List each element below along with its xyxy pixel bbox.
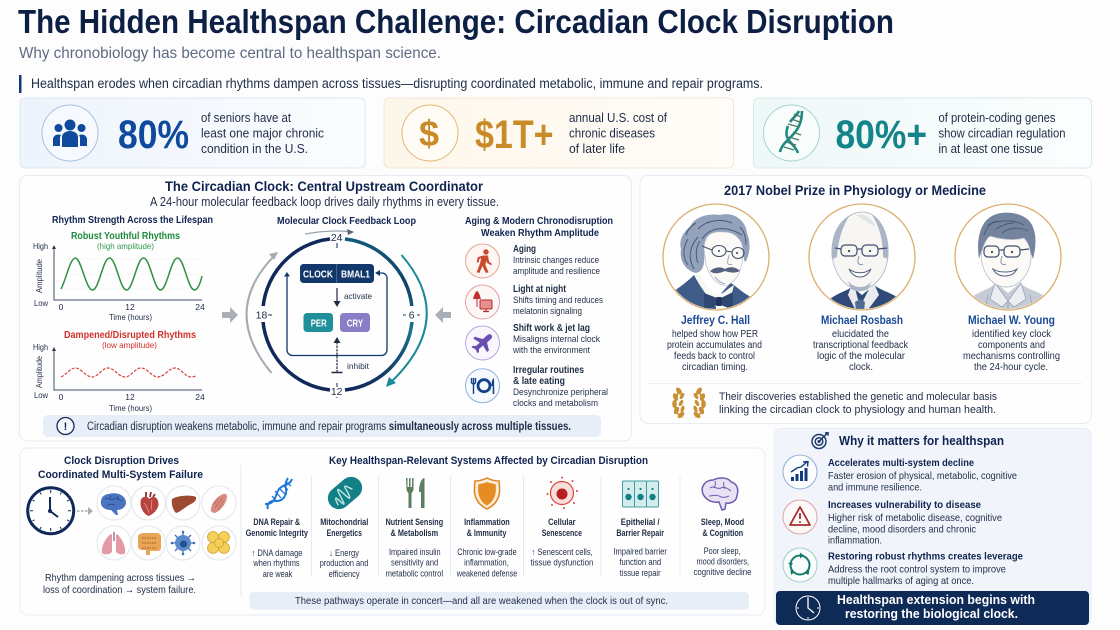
system: sleep xyxy=(694,478,752,577)
node: PER xyxy=(304,313,333,332)
node: CLOCK BMAL1: CLOCK xyxy=(303,270,334,280)
stat description: least one major chronic xyxy=(201,126,324,140)
callout: disruption: Circadian disruption weakens metabolic, immune and repair programs simultaneously across multiple tissues. xyxy=(87,421,571,433)
item: accelerates decline: and immune resilience. xyxy=(828,482,922,494)
item: vulnerability xyxy=(783,499,1002,546)
system: DNA repair: when rhythms xyxy=(253,558,300,568)
item: restoring rhythms: Address the root control system to improve xyxy=(828,564,1006,576)
line chart: robust rhythms: (high amplitude) xyxy=(97,241,154,251)
line chart: robust rhythms: 24 xyxy=(195,302,205,312)
panel: circadian clock xyxy=(20,176,632,441)
line chart: dampened rhythms: 0 xyxy=(59,392,64,402)
node: CRY: CRY xyxy=(347,318,363,330)
system: sleep: mood disorders, xyxy=(696,556,749,566)
panel subheading: A 24-hour molecular feedback loop drives daily rhythms in every tissue. xyxy=(150,195,499,209)
list item: light at night: Light at night xyxy=(513,284,567,295)
callout: disruption: ! xyxy=(64,421,67,433)
system: nutrient sensing: metabolic control xyxy=(386,568,443,578)
callout: disruption xyxy=(43,415,601,437)
item: accelerates decline xyxy=(783,455,1017,494)
item: accelerates decline: Accelerates multi-system decline xyxy=(828,457,974,469)
system: senescence: ↑ Senescent cells, xyxy=(531,547,593,557)
organ: muscle xyxy=(211,494,227,513)
line chart: dampened rhythms: 24 xyxy=(195,392,205,402)
line chart: dampened rhythms: Amplitude xyxy=(34,356,44,388)
laureate: Hall: Jeffrey C. Hall xyxy=(681,313,750,327)
system: nutrient sensing xyxy=(386,478,443,578)
banner: healthspan extension: restoring the biological clock. xyxy=(845,607,1018,621)
icon: dollar: $ xyxy=(419,113,439,154)
arrow: activate xyxy=(334,288,372,307)
column heading: lifespan: Rhythm Strength Across the Lifespan xyxy=(52,214,213,226)
system: epithelial: function and xyxy=(619,557,661,567)
stat value: 80%+ xyxy=(836,113,927,157)
laureate: Rosbash: clock. xyxy=(849,362,873,373)
system: sleep: & Cognition xyxy=(702,528,743,538)
system: epithelial: Barrier Repair xyxy=(616,528,664,538)
system: inflammation: weakened defense xyxy=(456,568,517,578)
organ icons xyxy=(97,486,236,560)
system: DNA repair xyxy=(246,478,308,579)
panel: why it matters xyxy=(774,428,1091,625)
closing statement xyxy=(719,391,997,416)
arrow: activate: activate xyxy=(344,291,372,301)
panel heading: The Circadian Clock: Central Upstream Coordinator xyxy=(165,179,484,194)
icon: epithelial cells xyxy=(622,481,658,507)
line chart: dampened rhythms: 12 xyxy=(125,392,135,402)
system: inflammation: & Immunity xyxy=(467,528,506,538)
system: mitochondria: efficiency xyxy=(329,569,360,579)
laureate: Hall: helped show how PER xyxy=(672,329,758,340)
callout: pathways in concert xyxy=(250,592,749,610)
line chart: dampened rhythms: Time (hours) xyxy=(109,403,152,413)
system: nutrient sensing: Nutrient Sensing xyxy=(386,517,443,527)
line chart: robust rhythms xyxy=(33,230,205,322)
system: epithelial xyxy=(613,481,667,578)
list item: aging: Aging xyxy=(513,244,536,255)
line chart: robust rhythms: Amplitude xyxy=(34,259,44,293)
panel heading: Why it matters for healthspan xyxy=(839,433,1004,448)
stat description xyxy=(938,111,1066,156)
stat description: of later life xyxy=(569,142,625,156)
list item: irregular routines: Desynchronize peripheral xyxy=(513,387,608,397)
icon: laurel wreath xyxy=(672,386,706,419)
item: vulnerability: Higher risk of metabolic disease, cognitive xyxy=(828,512,1002,524)
list item: aging xyxy=(466,244,600,278)
list item: light at night: Shifts timing and reduces xyxy=(513,295,603,305)
laureate: Hall: protein accumulates and xyxy=(667,340,762,351)
list item: shift work: with the environment xyxy=(512,345,590,355)
system: DNA repair: DNA Repair & xyxy=(253,517,300,527)
diagram: molecular clock loop: 18 xyxy=(256,310,267,322)
system: mitochondria xyxy=(320,472,368,579)
system: inflammation: Chronic low-grade xyxy=(457,547,517,557)
line chart: dampened rhythms: High xyxy=(33,342,48,352)
system: nutrient sensing: & Metabolism xyxy=(390,528,438,538)
icon: brain xyxy=(702,478,738,510)
heading: key systems: Key Healthspan-Relevant Systems Affected by Circadian Disruption xyxy=(329,455,648,467)
list item: shift work: Shift work & jet lag xyxy=(513,323,590,334)
callout: pathways in concert: These pathways operate in concert—and all are weakened when the clock is out of sync. xyxy=(295,595,668,607)
lead statement: Healthspan erodes when circadian rhythms dampen across tissues—disrupting coordinated metabolic, immune and repair programs. xyxy=(31,76,763,91)
organ: heart xyxy=(140,492,158,516)
panel: Nobel Prize xyxy=(640,176,1092,424)
stat description: show circadian regulation xyxy=(938,126,1066,140)
panel: multi-system failure xyxy=(20,448,765,615)
item: vulnerability: inflammation. xyxy=(828,534,882,546)
line chart: dampened rhythms: Dampened/Disrupted Rhythms xyxy=(64,329,196,341)
stat description: chronic diseases xyxy=(569,126,655,140)
line chart: dampened rhythms xyxy=(33,329,205,413)
item: accelerates decline: Faster erosion of physical, metabolic, cognitive xyxy=(828,470,1017,482)
icon: DNA xyxy=(265,478,292,509)
item: restoring rhythms: multiple hallmarks of aging at once. xyxy=(828,575,974,587)
line chart: robust rhythms: Time (hours) xyxy=(109,312,152,322)
system: epithelial: Epithelial / xyxy=(621,517,660,527)
arrow: left input xyxy=(222,307,238,323)
item: restoring rhythms xyxy=(783,548,1023,587)
organ: fat cells xyxy=(208,532,230,554)
stat value: 80% xyxy=(118,113,189,157)
caption: rhythm dampening xyxy=(43,572,196,596)
diagram: molecular clock loop: 12 xyxy=(331,386,343,398)
column heading: chronodisruption: Weaken Rhythm Amplitude xyxy=(481,227,599,239)
system: DNA repair: ↑ DNA damage xyxy=(252,548,302,558)
icon: dollar xyxy=(402,105,458,161)
icon: target xyxy=(812,433,828,448)
laureate: Young: identified key clock xyxy=(972,329,1052,340)
banner: healthspan extension xyxy=(776,591,1089,625)
organ: lungs xyxy=(102,532,125,554)
system: inflammation xyxy=(456,478,517,578)
item: restoring rhythms: Restoring robust rhythms creates leverage xyxy=(828,550,1023,562)
line chart: robust rhythms: 0 xyxy=(59,302,64,312)
icon: banner clock xyxy=(796,596,820,620)
arrow: inhibit: inhibit xyxy=(347,361,370,371)
line chart: robust rhythms: Low xyxy=(34,298,49,308)
node: CLOCK BMAL1: BMAL1 xyxy=(341,270,370,280)
list item: aging: amplitude and resilience xyxy=(513,266,600,276)
system: mitochondria: ↓ Energy xyxy=(329,548,360,558)
line chart: robust rhythms: Robust Youthful Rhythms xyxy=(71,230,180,242)
diagram: molecular clock loop: 6 xyxy=(409,310,415,322)
organ: brain xyxy=(101,493,126,515)
column heading: feedback loop: Molecular Clock Feedback Loop xyxy=(277,215,416,227)
system: senescence: Senescence xyxy=(542,528,582,538)
laureate: Rosbash: transcriptional feedback xyxy=(813,340,909,351)
system: senescence: tissue dysfunction xyxy=(530,558,593,568)
system: inflammation: Inflammation xyxy=(464,517,510,527)
list item: irregular routines: clocks and metabolism xyxy=(513,398,598,408)
portrait: Michael W. Young xyxy=(955,204,1061,317)
system: DNA repair: are weak xyxy=(263,569,293,579)
list item: shift work: Misaligns internal clock xyxy=(513,334,600,344)
organ: liver xyxy=(172,496,196,513)
node: CRY xyxy=(340,313,370,332)
laureate: Rosbash: logic of the molecular xyxy=(817,351,906,362)
laureate: Hall: circadian timing. xyxy=(682,362,748,373)
arrow: clock to organs xyxy=(77,507,93,515)
feedback wiring xyxy=(287,273,387,356)
panel heading: 2017 Nobel Prize in Physiology or Medicine xyxy=(724,182,986,198)
line chart: robust rhythms: High xyxy=(33,241,48,251)
column heading: chronodisruption: Aging & Modern Chronodisruption xyxy=(465,215,613,227)
list item: irregular routines: Irregular routines xyxy=(513,365,584,376)
closing statement: Their discoveries established the genetic and molecular basis xyxy=(719,391,997,403)
list item: light at night xyxy=(466,284,603,319)
laureate: Rosbash xyxy=(813,313,909,373)
subtitle: Why chronobiology has become central to healthspan science. xyxy=(19,45,441,62)
list item: aging: Intrinsic changes reduce xyxy=(513,255,599,265)
line chart: robust rhythms: 12 xyxy=(125,302,135,312)
line chart: dampened rhythms: Low xyxy=(34,390,49,400)
icon: people xyxy=(42,105,98,161)
stat card: genes xyxy=(754,98,1092,168)
system: epithelial: Impaired barrier xyxy=(613,546,667,556)
list item: shift work xyxy=(466,323,600,360)
laureate: Young: the 24-hour cycle. xyxy=(974,362,1048,373)
stat description xyxy=(201,111,324,156)
system: mitochondria: Mitochondrial xyxy=(320,517,368,527)
list item: irregular routines xyxy=(466,365,608,408)
portrait: Jeffrey C. Hall xyxy=(663,204,769,317)
system: mitochondria: Energetics xyxy=(327,528,362,538)
laureate: Young: Michael W. Young xyxy=(968,313,1055,327)
laureate: Young xyxy=(963,313,1060,373)
icon: senescent cell xyxy=(546,476,578,509)
system: mitochondria: production and xyxy=(320,558,368,568)
system: senescence xyxy=(530,476,593,568)
item: vulnerability: Increases vulnerability to disease xyxy=(828,499,981,511)
diagram: molecular clock loop xyxy=(247,229,427,398)
stat description: annual U.S. cost of xyxy=(569,111,667,125)
system: sleep: Sleep, Mood xyxy=(701,517,744,527)
arrow: inhibit xyxy=(332,337,370,372)
heading: clock disruption: Clock Disruption Drives xyxy=(64,455,179,467)
system: sleep: cognitive decline xyxy=(694,567,752,577)
icon: fork and knife xyxy=(406,478,424,508)
icon: clock xyxy=(28,488,74,534)
caption: rhythm dampening: loss of coordination → system failure. xyxy=(43,584,196,596)
icon: mitochondrion xyxy=(323,472,367,514)
node: PER: PER xyxy=(311,318,327,330)
stat description: condition in the U.S. xyxy=(201,142,308,156)
system: senescence: Cellular xyxy=(548,517,576,527)
list item: irregular routines: & late eating xyxy=(513,376,565,387)
stat description: of seniors have at xyxy=(201,111,291,125)
caption: rhythm dampening: Rhythm dampening across tissues → xyxy=(45,572,196,584)
closing statement: linking the circadian clock to physiology and human health. xyxy=(719,404,996,416)
laureate: Rosbash: elucidated the xyxy=(832,329,889,340)
system: epithelial: tissue repair xyxy=(620,568,661,578)
organ: intestine xyxy=(138,533,161,555)
laureate: Young: mechanisms controlling xyxy=(963,351,1060,362)
system: inflammation: inflammation, xyxy=(464,558,509,568)
icon: DNA helix xyxy=(764,105,820,161)
arrow: right input xyxy=(435,307,451,323)
organ: immune cell xyxy=(171,531,195,555)
column heading: chronodisruption xyxy=(465,215,613,239)
stat card: cost xyxy=(384,98,734,168)
system: nutrient sensing: Impaired insulin xyxy=(389,547,441,557)
system: sleep: Poor sleep, xyxy=(704,546,741,556)
stat card: seniors xyxy=(20,98,365,168)
laureate: Hall xyxy=(667,313,762,373)
heading: clock disruption: Coordinated Multi-System Failure xyxy=(38,469,203,481)
stat description: of protein-coding genes xyxy=(938,111,1056,125)
list item: light at night: melatonin signaling xyxy=(513,306,582,316)
title: The Hidden Healthspan Challenge: Circadian Clock Disruption xyxy=(18,3,894,40)
node: CLOCK BMAL1 xyxy=(300,264,374,283)
laureate: Young: components and xyxy=(978,340,1045,351)
laureate: Hall: feeds back to control xyxy=(674,351,755,362)
heading: clock disruption xyxy=(38,455,203,481)
system: nutrient sensing: sensitivity and xyxy=(391,558,438,568)
diagram: molecular clock loop: 24 xyxy=(331,232,343,244)
portrait: Michael Rosbash xyxy=(809,204,915,317)
item: vulnerability: decline, mood disorders and chronic xyxy=(828,524,976,536)
line chart: dampened rhythms: (low amplitude) xyxy=(102,340,157,350)
stat description xyxy=(569,111,667,156)
stat description: in at least one tissue xyxy=(938,142,1043,156)
laureate: Rosbash: Michael Rosbash xyxy=(821,313,903,327)
stat value: $1T+ xyxy=(475,113,554,157)
banner: healthspan extension: Healthspan extension begins with xyxy=(837,593,1035,607)
system: DNA repair: Genomic Integrity xyxy=(246,528,308,538)
icon: shield xyxy=(474,478,500,509)
